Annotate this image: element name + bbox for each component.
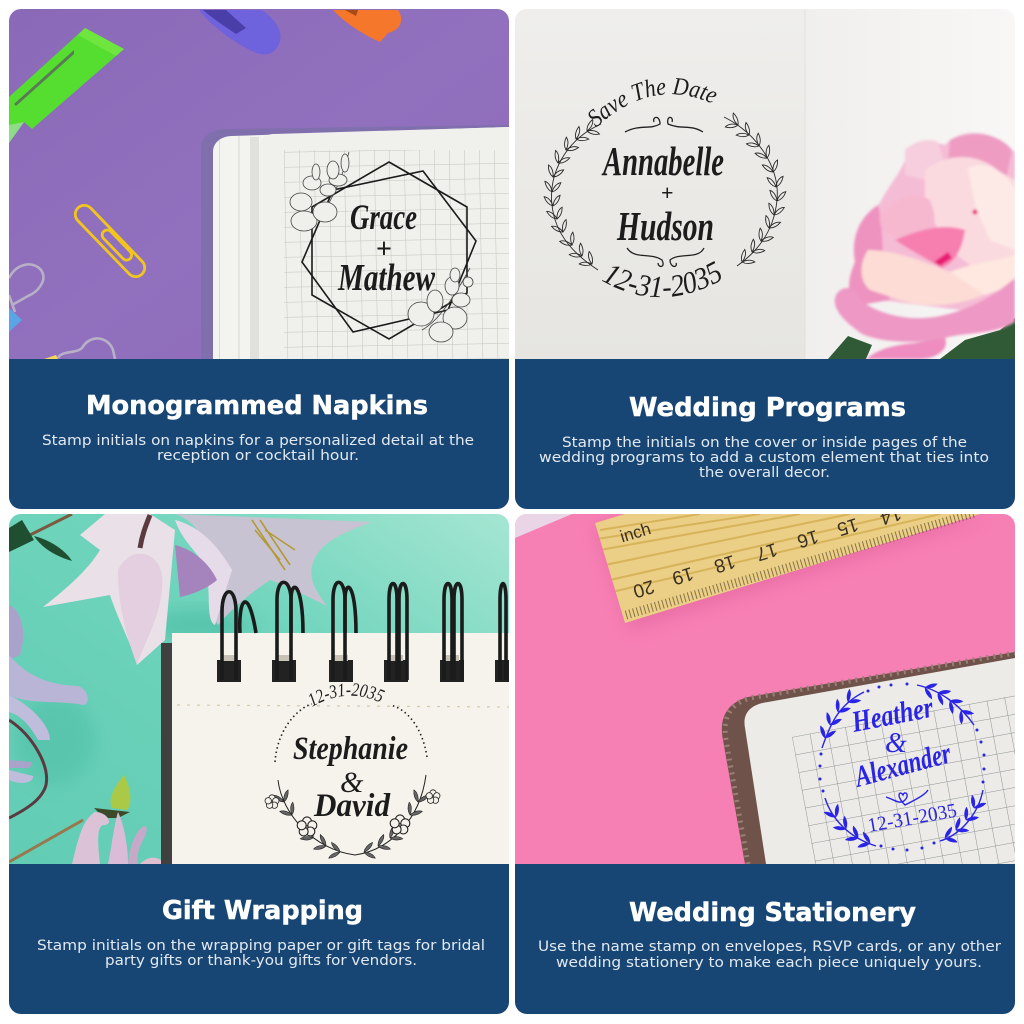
body text: the overall decor. <box>699 465 830 481</box>
notebook <box>722 652 1015 864</box>
icon: leaves and stem <box>9 514 72 561</box>
foliage: top left <box>290 152 349 231</box>
icon: yellow paperclip <box>74 204 146 278</box>
stamp: save the date wreath <box>544 78 786 298</box>
heading: Monogrammed Napkins <box>86 391 428 421</box>
stamp text: date arc: 12-31-2035 <box>309 683 386 707</box>
body text: reception or cocktail hour. <box>157 448 359 464</box>
ruler <box>590 502 980 623</box>
body text: wedding programs to add a custom element that ties into <box>539 450 989 466</box>
panel: wedding stationery <box>515 502 1015 1014</box>
caption panel: gift wrapping <box>9 864 509 1014</box>
heading: Wedding Stationery <box>629 898 916 928</box>
notebook <box>201 125 509 359</box>
stamp: floral wreath with names <box>264 683 440 858</box>
icon: left flower and stem <box>9 605 88 818</box>
stamp text: ampersand: & <box>885 728 907 759</box>
body text <box>37 938 485 969</box>
body text <box>540 436 988 477</box>
ruler labels: 18 <box>711 550 738 576</box>
stamp text: ampersand: & <box>340 766 364 799</box>
body text: Stamp the initials on the cover or inside pages of the <box>562 435 967 451</box>
caption panel: wedding programs <box>515 359 1015 509</box>
blue dots <box>818 682 986 852</box>
stamp text: plus: + <box>661 180 674 205</box>
stamp text: Grace: Grace <box>350 197 417 237</box>
photo: card with peony <box>515 9 1015 359</box>
body text: Stamp initials on napkins for a personalized detail at the <box>42 433 474 449</box>
panel: monogrammed napkins <box>9 9 509 509</box>
stamp text: Hudson: Hudson <box>616 203 714 249</box>
notebook page <box>161 633 509 864</box>
icon: binder clips <box>9 264 115 359</box>
stamp text: Annabelle: Annabelle <box>601 138 724 184</box>
stamp text: Alexander: Alexander <box>850 736 955 794</box>
stamp text: Save The Date: Save The Date <box>588 78 716 127</box>
icon: lily flowers <box>43 514 372 665</box>
body text: wedding stationery to make each piece uniquely yours. <box>556 955 982 971</box>
blue branches <box>817 680 986 851</box>
body text: party gifts or thank-you gifts for vendors. <box>105 953 417 969</box>
photo: pink desk with ruler and notebook <box>515 502 1015 864</box>
icon: bud and pink stems <box>9 775 165 864</box>
caption panel: monogrammed napkins <box>9 359 509 509</box>
icon: purple clip <box>199 10 280 54</box>
ruler labels: 16 <box>794 525 821 551</box>
wreath left <box>544 120 601 270</box>
stamp text: date: 12-31-2035 <box>602 261 721 298</box>
photo: teal desk with spiral notebook <box>9 514 509 864</box>
stamp text: date: 12-31-2035 <box>866 800 959 837</box>
floral wreath <box>265 775 440 860</box>
wreath right <box>724 113 786 268</box>
ruler labels <box>618 502 904 601</box>
caption panel: wedding stationery <box>515 864 1015 1014</box>
ruler labels: 17 <box>753 538 780 564</box>
spiral binding <box>217 582 509 682</box>
stamp: blue wreath with names <box>817 680 986 852</box>
stamp text: David: David <box>313 788 390 824</box>
ruler labels: 14 <box>877 502 904 529</box>
panel: gift wrapping <box>9 514 509 1014</box>
panel: wedding programs <box>515 9 1015 509</box>
heading: Wedding Programs <box>629 393 906 423</box>
stamp text: Stephanie: Stephanie <box>293 731 408 767</box>
body text <box>42 433 474 464</box>
stamp text: Heather: Heather <box>848 691 936 739</box>
icon: orange clip <box>333 10 401 42</box>
stamp text: Mathew: Mathew <box>337 257 435 299</box>
photo: purple desk with notebook <box>9 9 509 359</box>
ruler labels: 15 <box>834 513 861 539</box>
icon: peony flower <box>828 133 1015 359</box>
flourishes <box>625 117 704 266</box>
small heart ornament <box>886 790 928 805</box>
foliage: bottom right <box>408 268 473 342</box>
stamp text: plus: + <box>376 234 392 265</box>
body text: Stamp initials on the wrapping paper or gift tags for bridal <box>37 938 485 954</box>
body text <box>538 939 1001 971</box>
ruler labels: 19 <box>669 562 696 588</box>
stamp: hexagon frame with names <box>290 152 476 342</box>
ruler labels: inch <box>618 519 653 546</box>
body text: Use the name stamp on envelopes, RSVP cards, or any other <box>538 939 1001 955</box>
ruler labels: 20 <box>630 575 657 601</box>
heading: Gift Wrapping <box>162 896 363 926</box>
icon: green highlighter <box>9 28 124 143</box>
